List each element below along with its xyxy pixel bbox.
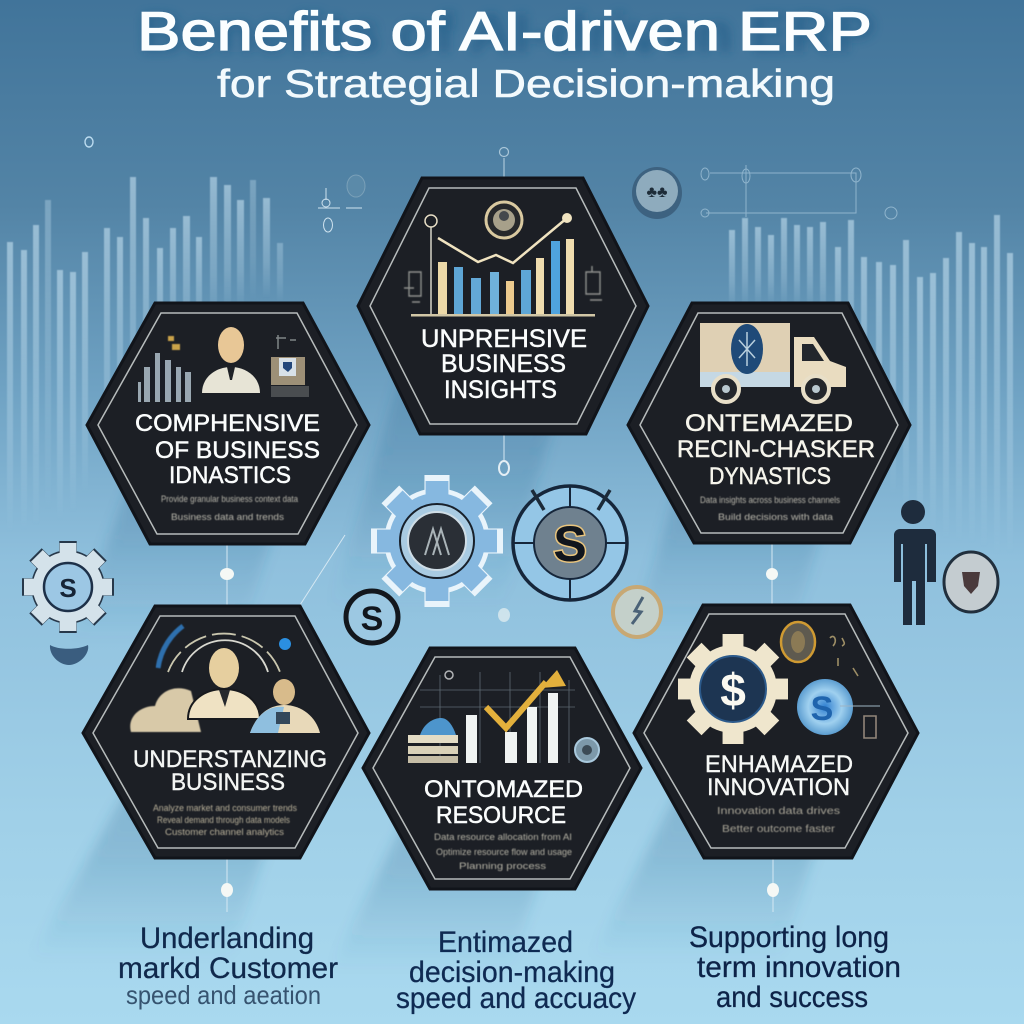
diagonal hexagon shadows: [30, 310, 850, 970]
icon: gear: [678, 634, 788, 744]
icon: side doodles: [404, 266, 602, 302]
caption: left: [118, 922, 338, 1010]
panel description: [161, 494, 298, 522]
connectors: [220, 434, 779, 912]
icon: small dollar coin: S: [361, 600, 383, 638]
icon: blue coin: [797, 679, 880, 735]
icon: person silhouette: [894, 500, 936, 625]
caption: centre: Entimazed: [438, 926, 573, 959]
panel heading: OF BUSINESS: [155, 437, 320, 464]
chart grid: [420, 671, 575, 763]
caption: left: markd Customer: [118, 952, 338, 985]
bar chart: [411, 213, 595, 316]
panel heading: BUSINESS: [171, 769, 285, 796]
icon: left gear: [22, 541, 114, 665]
icon: gold badge: [781, 622, 815, 662]
network diagram: [701, 165, 897, 219]
panel description: Build decisions with data: [718, 512, 833, 522]
panel heading: INSIGHTS: [444, 376, 557, 404]
icon: dark coin: [632, 167, 682, 219]
icon: doodles: [318, 175, 365, 232]
icon: small pin left: [85, 137, 93, 147]
panel heading: RESOURCE: [436, 802, 566, 829]
panel description: Customer channel analytics: [165, 827, 285, 837]
icon: arcs: [158, 626, 291, 672]
icon: small dial: [575, 738, 599, 762]
panel description: Innovation data drives: [717, 806, 840, 817]
panel heading: ENHAMAZED: [705, 751, 853, 778]
gold arrow: [486, 670, 566, 728]
icon: small marks: [830, 636, 876, 738]
caption: centre: decision-making: [409, 956, 615, 989]
panel heading: [133, 746, 327, 796]
icon: person: [188, 648, 260, 719]
panel description: [700, 495, 840, 522]
panel description: Planning process: [459, 861, 547, 871]
panel description: Business data and trends: [171, 512, 285, 522]
icon: gear: $: [720, 664, 746, 716]
panel: comprehensive of business dynamics: [87, 303, 369, 544]
panel heading: COMPHENSIVE: [135, 410, 320, 437]
caption: left: speed and aeation: [126, 980, 321, 1010]
hexagon frame: [83, 606, 369, 858]
decorative top icons: [85, 137, 897, 232]
caption: left: Underlanding: [140, 922, 314, 955]
panel description: Reveal demand through data models: [157, 815, 290, 825]
hexagon frame: [634, 605, 918, 858]
icon: dollar dial: [513, 486, 627, 600]
panel: unprehsive business insights: [358, 178, 648, 434]
panel description: Provide granular business context data: [161, 494, 298, 504]
icon: person: [202, 327, 260, 393]
caption: right: Supporting long: [689, 921, 889, 954]
icon: card: [271, 335, 309, 397]
icon: coin: [486, 202, 522, 238]
panel description: Data insights across business channels: [700, 495, 840, 505]
panel heading: UNPREHSIVE: [421, 325, 587, 353]
main title text: Benefits of AI-driven ERP: [137, 0, 872, 62]
caption: right: [689, 921, 901, 1014]
panel heading: ONTOMAZED: [424, 776, 583, 803]
icon: second person: [250, 679, 320, 733]
icon: cloud: [130, 688, 201, 732]
title: [137, 0, 875, 64]
icon: left gear: S: [59, 573, 77, 603]
panel description: Optimize resource flow and usage: [436, 847, 572, 857]
panel description: [717, 806, 840, 835]
icon: dollar dial: S: [553, 516, 587, 572]
panel description: [434, 832, 572, 871]
icon: dark coin: ♣♣: [646, 184, 668, 201]
icon: gold marks: [168, 336, 180, 350]
caption: centre: [396, 926, 636, 1015]
icon: centre gear: [371, 475, 503, 607]
panel heading: [421, 325, 587, 404]
caption: right: and success: [716, 981, 868, 1014]
panel heading: [424, 776, 583, 829]
title glow: Benefits of AI-driven ERP: [140, 2, 875, 64]
panel: understanzing business: [83, 606, 369, 858]
panel heading: RECIN-CHASKER: [677, 436, 875, 463]
icon: blue coin: S: [811, 690, 833, 728]
panel: ontemazed recin-chasker dynastics: [628, 303, 910, 543]
panel heading: DYNASTICS: [709, 463, 831, 490]
background bar chart left: [7, 177, 283, 532]
panel heading: [677, 410, 875, 490]
hexagon frame: [358, 178, 648, 434]
panel: enhamazed innovation: [634, 605, 918, 858]
panel description: Better outcome faster: [722, 824, 836, 835]
background bar chart right: [729, 215, 1013, 555]
panel description: [153, 803, 297, 837]
hexagon frame: [363, 648, 641, 889]
panel: ontomazed resource: [363, 648, 641, 889]
icon: small dollar coin: [346, 591, 398, 643]
caption: right: term innovation: [697, 951, 901, 984]
hexagon frame: [628, 303, 910, 543]
panel heading: BUSINESS: [441, 350, 566, 378]
icon: truck: [700, 323, 846, 402]
panel heading: IDNASTICS: [169, 462, 291, 489]
panel heading: [135, 410, 320, 489]
panel heading: UNDERSTANZING: [133, 746, 327, 773]
icon: small pin centre: [500, 148, 508, 178]
subtitle: for Strategial Decision-making: [217, 63, 835, 106]
white bars: [466, 693, 558, 763]
icon: gold coin: [613, 587, 661, 637]
panel heading: ONTEMAZED: [685, 410, 853, 437]
icon: bars: [138, 353, 191, 402]
icon: stack: [408, 718, 458, 763]
hexagon frame: [87, 303, 369, 544]
panel heading: [705, 751, 853, 801]
icon: shield coin: [944, 552, 998, 612]
caption: centre: speed and accuacy: [396, 982, 636, 1015]
panel description: Data resource allocation from AI: [434, 832, 572, 842]
panel heading: INNOVATION: [707, 774, 850, 801]
panel description: Analyze market and consumer trends: [153, 803, 297, 813]
